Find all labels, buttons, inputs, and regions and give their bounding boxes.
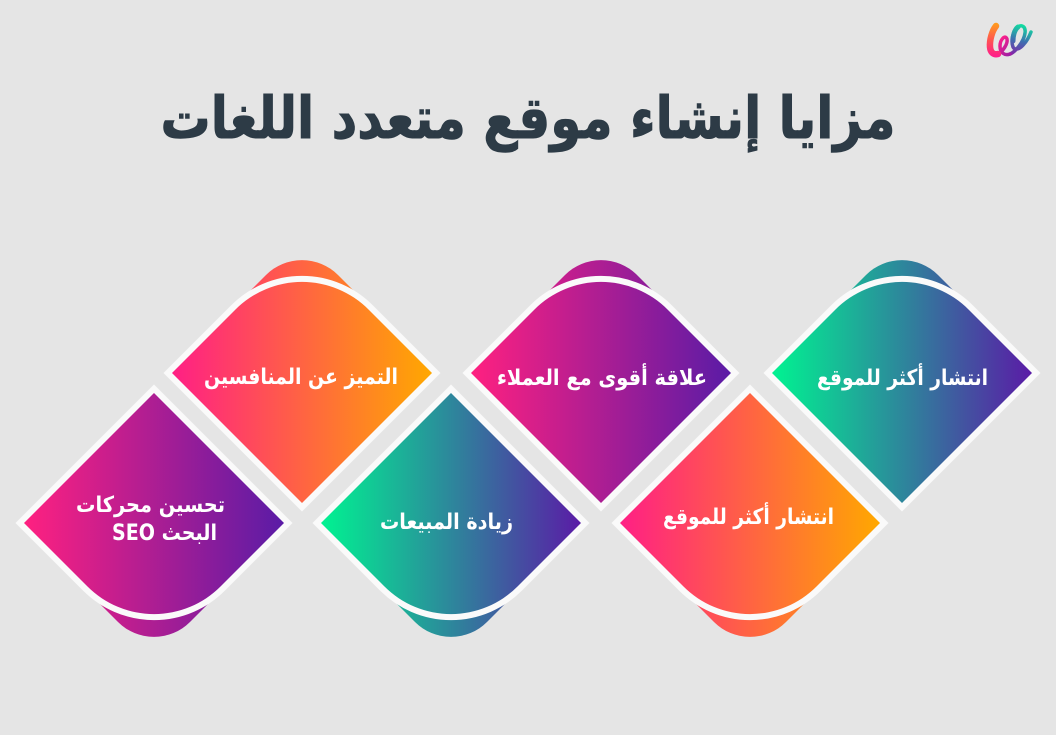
back cap <box>690 598 810 637</box>
label: انتشار أكثر للموقع <box>663 501 834 530</box>
panel: website reach (bottom right) <box>620 393 880 637</box>
diamond <box>321 393 581 614</box>
label: البحث SEO <box>112 521 217 546</box>
back cap <box>842 260 962 299</box>
panel: customer relationship (top middle) <box>471 260 731 503</box>
panel: increased sales (bottom middle) <box>321 393 581 637</box>
panel: standing out from competitors (top left) <box>172 260 432 503</box>
label: انتشار أكثر للموقع <box>817 362 988 391</box>
back cap <box>242 260 362 299</box>
label: زيادة المبيعات <box>380 510 513 535</box>
panel: website reach (top right) <box>772 260 1032 503</box>
diamond <box>772 282 1032 503</box>
label: التميز عن المنافسين <box>204 365 398 390</box>
diamond <box>172 282 432 503</box>
label: علاقة أقوى مع العملاء <box>497 362 707 391</box>
label: تحسين محركات <box>76 493 225 518</box>
diamond <box>24 393 284 614</box>
icon: logo <box>990 26 1031 55</box>
diamond <box>620 393 880 614</box>
diamond <box>471 282 731 503</box>
back cap <box>391 598 511 637</box>
back cap <box>94 598 214 637</box>
title: مزايا إنشاء موقع متعدد اللغات <box>160 84 896 153</box>
panel: search engine optimization (bottom left) <box>24 393 284 637</box>
back cap <box>541 260 661 299</box>
label <box>76 493 225 546</box>
